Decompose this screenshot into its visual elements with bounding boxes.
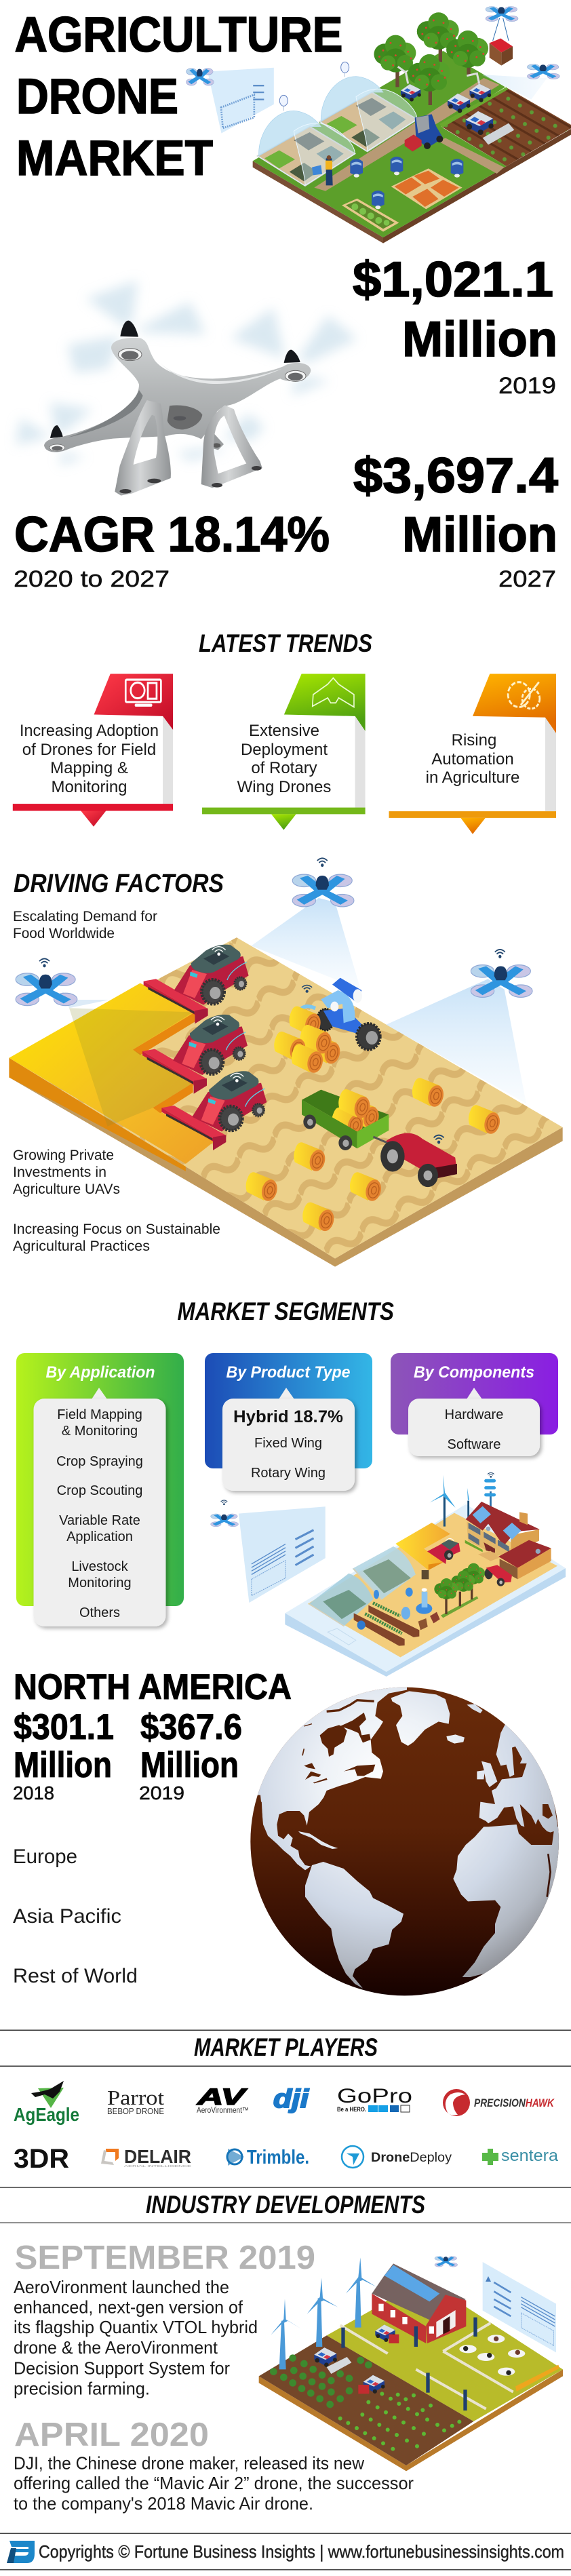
phone greenhouses: [309, 1546, 416, 1626]
development: april 2020: APRIL 2020: [14, 2417, 209, 2453]
logo: Delair: DELAIR: [124, 2146, 191, 2167]
ground: [259, 2279, 563, 2471]
farm workers: [341, 2318, 477, 2411]
logo: Delair: [101, 2146, 191, 2168]
market size 2019: [353, 252, 557, 399]
drone beams: [62, 898, 526, 1127]
development: september 2019: AeroVironment launched the: [14, 2277, 229, 2297]
card: rotary wing: of Rotary: [251, 759, 317, 777]
application list: Crop Spraying: [56, 1454, 143, 1469]
vegetable beds: [342, 168, 462, 232]
application list: Livestock: [71, 1559, 129, 1574]
card: field mapping: Increasing Adoption: [20, 722, 159, 740]
farm machines: [398, 66, 514, 151]
logo: DroneDeploy: [342, 2146, 452, 2168]
propeller blur: [16, 280, 357, 466]
driving factors text: Agricultural Practices: [13, 1238, 150, 1254]
camera: [165, 403, 203, 429]
product type list: [233, 1407, 343, 1481]
other regions: [13, 1846, 138, 1987]
greenhouses: [258, 62, 417, 186]
title: [15, 7, 343, 186]
green trailer: [302, 1089, 389, 1150]
application list: Variable Rate: [59, 1513, 140, 1528]
wind turbines: [271, 2257, 376, 2369]
value 2019: $367.6: [140, 1707, 242, 1747]
card: automation: in Agriculture: [426, 768, 519, 787]
driving factors text: Escalating Demand for: [13, 908, 157, 924]
title: AGRICULTURE: [15, 7, 343, 62]
product type list: Rotary Wing: [251, 1466, 326, 1481]
driving factors text: Agriculture UAVs: [13, 1181, 120, 1197]
title: DRONE: [16, 69, 178, 124]
logo: DroneDeploy: DroneDeploy: [371, 2151, 452, 2165]
logo: AeroVironment: AeroVironment™: [197, 2107, 249, 2115]
driving factors text: Investments in: [13, 1164, 106, 1180]
data panel: [211, 1500, 326, 1603]
house: [465, 1502, 551, 1579]
footer logo: [7, 2541, 35, 2563]
red tractor on phone: [485, 1565, 512, 1586]
logo: Sentera: sentera: [501, 2147, 559, 2165]
panel: by product type: [205, 1353, 372, 1491]
application list: [56, 1407, 143, 1620]
blue robot arm tractor: [298, 978, 380, 1050]
development: september 2019: Decision Support System for: [14, 2358, 230, 2378]
illustration: livestock farm: [259, 2257, 563, 2471]
logo: 3DR: 3DR: [14, 2144, 69, 2174]
CAGR: CAGR 18.14%: [14, 507, 330, 562]
driving factors text: Food Worldwide: [13, 925, 115, 941]
yellow bed: [515, 2365, 559, 2392]
market size 2019: 2019: [498, 373, 556, 399]
panel: trend cards: [13, 674, 556, 834]
value 2019: 2019: [139, 1782, 184, 1803]
farmer: [312, 155, 333, 185]
components list: [445, 1407, 503, 1452]
delivery drone: [486, 7, 518, 66]
heading: driving factors: DRIVING FACTORS: [14, 870, 224, 898]
icon: large grey drone: [16, 280, 357, 496]
field ground: [9, 937, 563, 1267]
market size 2019: $1,021.1: [353, 252, 553, 307]
camera opening: [168, 405, 202, 429]
development: september 2019: SEPTEMBER 2019: [15, 2240, 315, 2276]
logo: Trimble: [227, 2147, 309, 2168]
phone trees: [434, 1563, 485, 1618]
driving factors text: Growing Private: [13, 1147, 114, 1163]
market size 2027: [353, 448, 558, 592]
robots on phone: [357, 1570, 440, 1630]
farm ground: [253, 51, 571, 243]
card: automation: Automation: [431, 750, 514, 768]
heading: north america: NORTH AMERICA: [14, 1667, 292, 1707]
components list: Hardware: [445, 1407, 503, 1422]
card: rotary wing: Deployment: [241, 741, 328, 759]
development: april 2020: to the company's 2018 Mavic Air drone.: [14, 2493, 313, 2514]
footer: [0, 2533, 571, 2571]
development: april 2020: offering called the “Mavic Air 2” drone, the successor: [14, 2473, 414, 2493]
fences: [340, 2323, 513, 2409]
red tractor: [373, 1133, 457, 1187]
panel: by application: [16, 1353, 184, 1626]
panel: by application: By Application: [46, 1363, 155, 1382]
illustration: smart farm: [253, 7, 571, 243]
value 2018: [13, 1707, 114, 1803]
right leg: [201, 405, 262, 488]
harvested patch: [395, 1523, 460, 1570]
logo: Trimble: Trimble.: [247, 2147, 309, 2168]
logo: AeroVironment: [196, 2084, 249, 2115]
logo: Parrot: Parrot: [107, 2086, 164, 2109]
north america values: [13, 1707, 242, 1803]
market size 2027: Million: [402, 507, 557, 562]
combines: [142, 945, 267, 1150]
panel: by product type: By Product Type: [227, 1363, 350, 1382]
data panel: [483, 2262, 556, 2352]
logo: GoPro: GoPro: [337, 2085, 412, 2107]
body: [44, 338, 311, 452]
scanning drone: [481, 64, 559, 100]
market size 2019: Million: [402, 312, 557, 367]
card: rotary wing: Extensive: [249, 722, 319, 740]
title: MARKET: [16, 131, 213, 186]
heading: latest trends: LATEST TRENDS: [199, 629, 372, 657]
product type list: Fixed Wing: [254, 1436, 322, 1451]
logo: PrecisionHawk: PRECISIONHAWK: [474, 2096, 555, 2109]
CAGR: [14, 507, 330, 592]
value 2018: $301.1: [14, 1707, 114, 1747]
value 2019: [139, 1707, 242, 1803]
value 2018: Million: [14, 1745, 112, 1785]
value 2018: 2018: [13, 1782, 54, 1803]
logo: GoPro: Be a HERO.: [337, 2106, 366, 2113]
card: field mapping: [13, 674, 173, 827]
application list: Application: [66, 1529, 133, 1544]
logo: PrecisionHawk: [443, 2089, 555, 2116]
development: april 2020: DJI, the Chinese drone maker, released its new: [14, 2453, 364, 2473]
logo: Parrot: BEBOP DRONE: [107, 2106, 164, 2116]
panel: by components: By Components: [414, 1363, 534, 1382]
feet: [119, 466, 262, 494]
hay bales: [246, 1007, 502, 1233]
driving factors text: Increasing Focus on Sustainable: [13, 1221, 220, 1237]
logo: DJI: dji: [273, 2085, 310, 2113]
logo: AgEagle: AgEagle: [14, 2104, 79, 2125]
heading: market players: MARKET PLAYERS: [194, 2033, 378, 2061]
cows: [459, 2335, 525, 2376]
logo: Parrot: [107, 2086, 164, 2116]
market size 2027: 2027: [498, 566, 556, 592]
application list: & Monitoring: [62, 1424, 138, 1439]
driving factors text: [13, 908, 220, 1254]
globe: [244, 1682, 571, 1995]
other regions: Rest of World: [13, 1965, 138, 1987]
phone body: [285, 1504, 566, 1677]
card: field mapping: Monitoring: [51, 778, 127, 796]
application list: Crop Scouting: [57, 1483, 142, 1498]
card: automation: [389, 674, 556, 834]
application list: Field Mapping: [57, 1407, 142, 1422]
development: september 2019: enhanced, next-gen version of: [14, 2297, 243, 2317]
value 2019: Million: [140, 1745, 239, 1785]
rear arm: [210, 432, 224, 450]
trees: [374, 12, 488, 105]
card: field mapping: of Drones for Field: [22, 741, 156, 759]
illustration: farm on smartphone: [211, 1472, 566, 1677]
other regions: Europe: [13, 1846, 77, 1868]
application list: Monitoring: [68, 1576, 132, 1591]
development: september 2019: its flagship Quantix VTOL hybrid: [14, 2317, 258, 2337]
components list: Software: [448, 1437, 500, 1452]
development: april 2020: [14, 2417, 414, 2514]
rotor caps: [50, 321, 300, 438]
illustration: harvest field: [9, 858, 563, 1267]
development: september 2019: drone & the AeroVironment: [14, 2337, 218, 2358]
planter rows: [354, 1603, 419, 1646]
service robots: [350, 157, 463, 209]
card: rotary wing: [202, 674, 366, 830]
card: rotary wing: Wing Drones: [237, 778, 331, 796]
card: field mapping: Mapping &: [50, 759, 128, 777]
left leg: [115, 400, 171, 496]
application list: Others: [79, 1605, 120, 1620]
heading: market segments: MARKET SEGMENTS: [178, 1297, 394, 1325]
logo: GoPro: [337, 2085, 412, 2113]
logo: AgEagle: [14, 2081, 79, 2125]
drones: [16, 858, 532, 1006]
development: september 2019: precision farming.: [14, 2378, 150, 2398]
logo: Delair: AERIAL INTELLIGENCE: [124, 2164, 191, 2168]
crops and machines: [270, 2324, 461, 2451]
logo: AeroVironment: AV: [196, 2084, 248, 2110]
product type list: Hybrid 18.7%: [233, 1407, 343, 1426]
market size 2027: $3,697.4: [353, 448, 558, 503]
motor rings: [50, 349, 306, 451]
development: september 2019: [14, 2240, 315, 2398]
phone wind turbines: [430, 1472, 494, 1527]
logos: market players: [14, 2081, 559, 2174]
data panel with drone: [186, 68, 274, 134]
panel: by components: [391, 1353, 558, 1456]
other regions: Asia Pacific: [13, 1905, 121, 1928]
CAGR: 2020 to 2027: [14, 566, 170, 592]
card: automation: Rising: [452, 731, 496, 749]
barn: [372, 2263, 466, 2343]
heading: industry developments: INDUSTRY DEVELOPMENTS: [146, 2191, 425, 2219]
drone: [435, 2257, 458, 2267]
